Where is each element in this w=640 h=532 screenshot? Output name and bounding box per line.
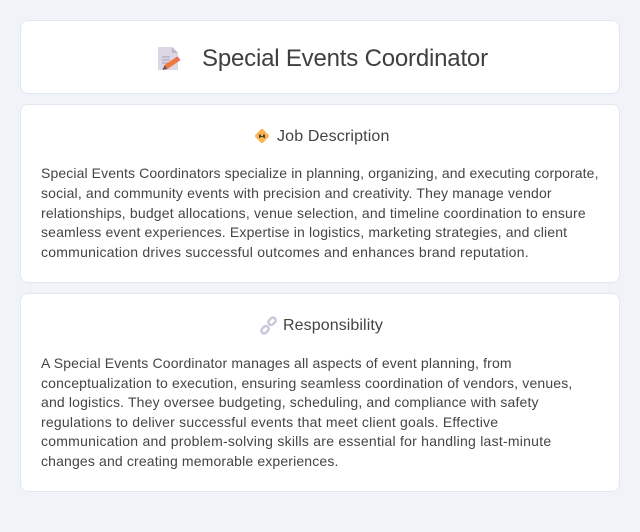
heading: job description: Job Description	[277, 128, 390, 145]
icon: orange diamond	[255, 128, 269, 144]
text block: job description: relationships, budget allocations, venue selection, and timeline coordination to ensure	[41, 205, 586, 221]
panel: responsibility	[20, 293, 620, 492]
text block: responsibility: and logistics. They oversee budgeting, scheduling, and compliance with safety	[41, 394, 539, 410]
text block: job description: seamless event experiences. Expertise in logistics, marketing strategies, and client	[41, 224, 567, 240]
text block: responsibility: conceptualization to execution, ensuring seamless coordination of vendors, venues,	[41, 375, 572, 391]
text block: job description	[41, 165, 599, 260]
text block: responsibility: communication and problem-solving skills are essential for handling last-minute	[41, 433, 551, 449]
text block: responsibility: regulations to deliver successful events that meet client goals. Effective	[41, 414, 498, 430]
icon: document with pencil	[158, 47, 180, 70]
panel: job description	[20, 104, 620, 283]
text block: job description: communication drives successful outcomes and enhances brand reputation.	[41, 244, 529, 260]
heading: responsibility: Responsibility	[283, 317, 383, 334]
title: Special Events Coordinator	[202, 45, 488, 72]
text block: responsibility: changes and creating memorable experiences.	[41, 453, 339, 469]
text block: job description: social, and community events with precision and creativity. They manage vendor	[41, 185, 552, 201]
icon: chain link	[260, 316, 277, 335]
panel: title card	[20, 20, 620, 94]
text block: job description: Special Events Coordinators specialize in planning, organizing, and executing corporate,	[41, 165, 599, 181]
text block: responsibility: A Special Events Coordinator manages all aspects of event planning, from	[41, 355, 512, 371]
